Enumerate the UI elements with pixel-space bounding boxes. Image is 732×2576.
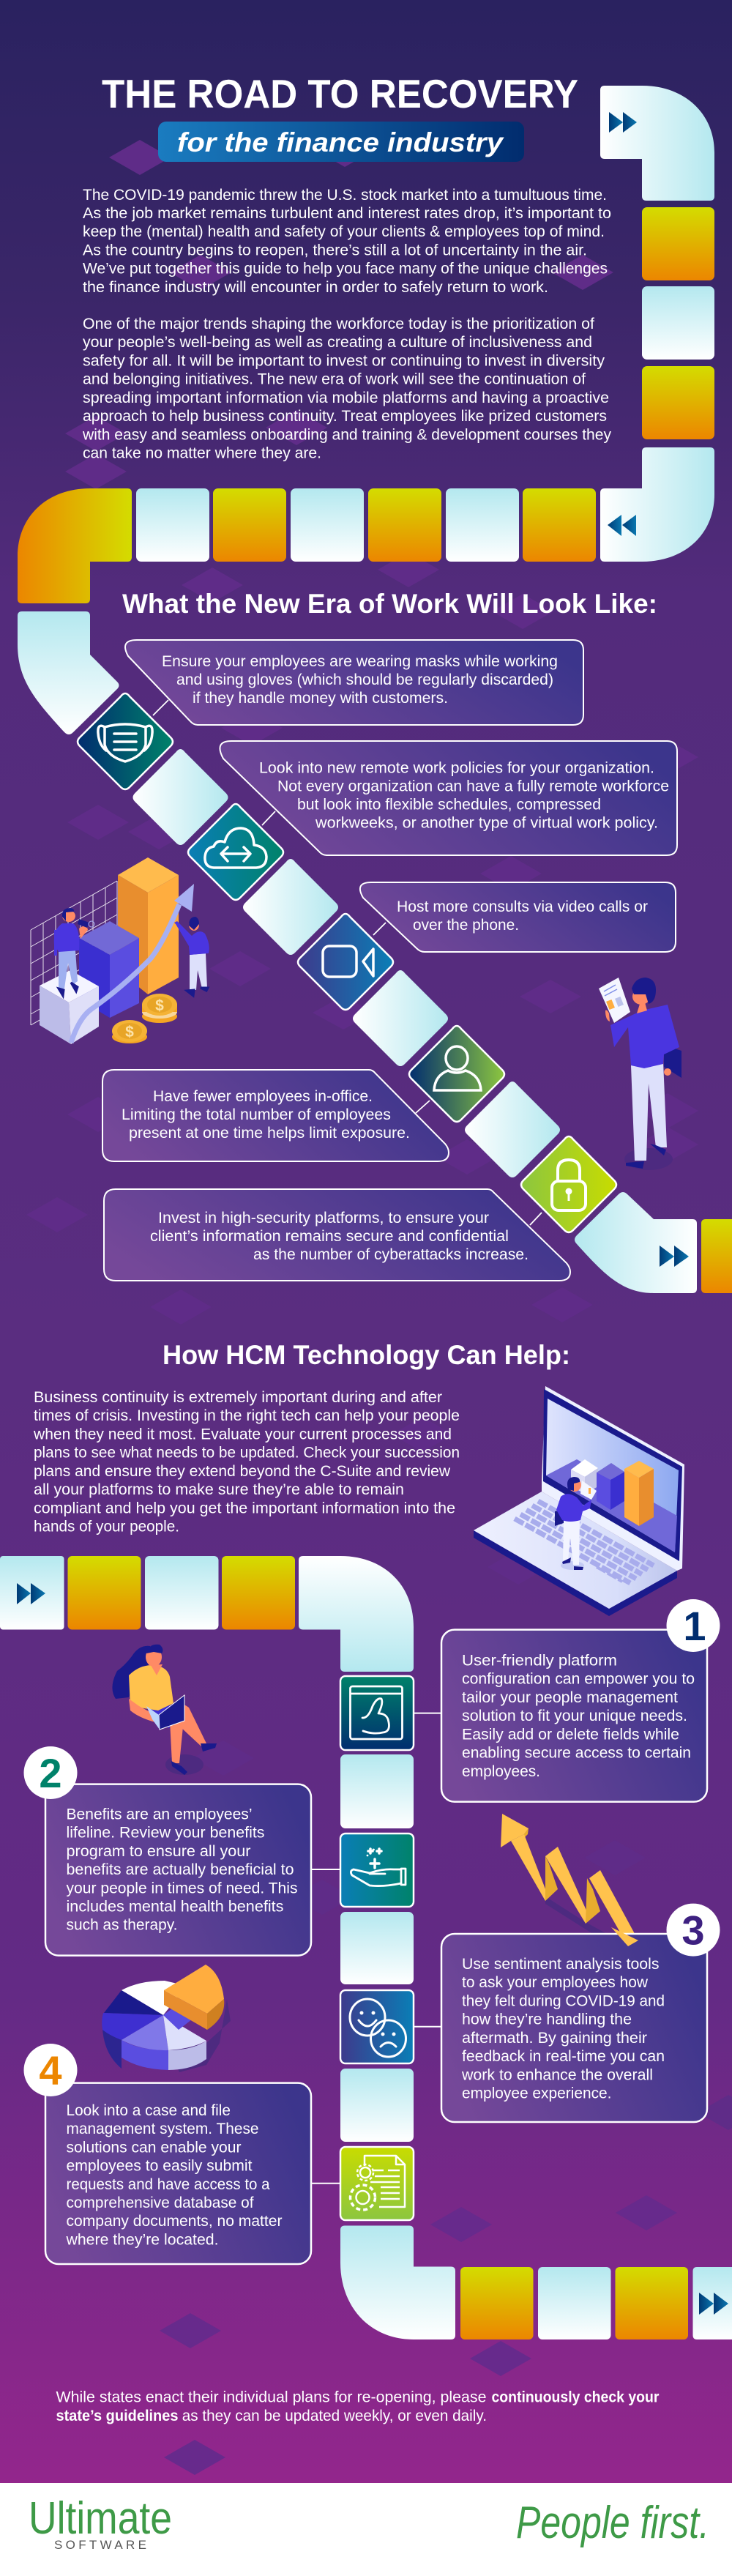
- intro paragraph two: and belonging initiatives. The new era of work will see the continuation of: [83, 371, 586, 388]
- HCM intro paragraph: compliant and help you get the important information into the: [34, 1500, 455, 1516]
- card 4: comprehensive database of: [66, 2195, 254, 2211]
- callout: masks: Ensure your employees are wearing masks while working: [162, 653, 558, 670]
- intro paragraph two: can take no matter where they are.: [83, 445, 321, 461]
- card 4: management system. These: [66, 2121, 259, 2137]
- badge 2: 2: [39, 1750, 62, 1796]
- icon: back arrows: [608, 515, 636, 536]
- keyboard: [515, 1501, 654, 1583]
- callout: security: Invest in high-security platforms, to ensure your: [158, 1210, 489, 1226]
- card 2: [23, 1746, 311, 1956]
- card 3: how they’re handling the: [462, 2011, 632, 2028]
- person left: [54, 908, 94, 996]
- coins: $: [155, 997, 164, 1014]
- callout: remote work: workweeks, or another type of virtual work policy.: [315, 814, 658, 832]
- card 1: User-friendly platform: [462, 1652, 617, 1669]
- title: THE ROAD TO RECOVERY: [102, 71, 578, 116]
- HCM intro paragraph: all your platforms to make sure they’re able to remain: [34, 1481, 404, 1498]
- card 3: they felt during COVID-19 and: [462, 1993, 665, 2009]
- intro paragraph one: The COVID-19 pandemic threw the U.S. stock market into a tumultuous time.: [83, 187, 607, 204]
- closing note: While states enact their individual plans for re-opening, please: [56, 2389, 486, 2406]
- callout: security: as the number of cyberattacks increase.: [253, 1246, 529, 1263]
- badge 3: [666, 1904, 720, 1957]
- coins: [112, 994, 177, 1043]
- card 2: includes mental health benefits: [66, 1898, 284, 1916]
- intro paragraph one: [83, 187, 611, 296]
- HCM intro paragraph: [33, 1389, 460, 1535]
- callout: fewer employees: present at one time helps limit exposure.: [129, 1125, 410, 1142]
- card 1: solution to fit your unique needs.: [462, 1708, 687, 1724]
- card 2: program to ensure all your: [66, 1843, 251, 1860]
- card 4: requests and have access to a: [66, 2176, 270, 2193]
- callout: security: [104, 1189, 570, 1281]
- subtitle banner: [158, 122, 524, 162]
- card 2: such as therapy.: [66, 1917, 177, 1934]
- callout: remote work: [220, 741, 677, 855]
- icon tile: documents and gears: [340, 2147, 414, 2220]
- card 1: tailor your people management: [462, 1689, 678, 1706]
- callout: remote work: Look into new remote work policies for your organization.: [259, 760, 654, 776]
- badge 2: [23, 1746, 78, 1799]
- white cube: [40, 970, 99, 1002]
- closing note: as they can be updated weekly, or even daily.: [182, 2408, 487, 2424]
- heading: new era of work: What the New Era of Work Will Look Like:: [122, 589, 657, 619]
- card 4: where they’re located.: [65, 2231, 218, 2248]
- card 4: employees to easily submit: [66, 2158, 253, 2175]
- illustration: bar chart team: [31, 857, 209, 1044]
- heading: HCM technology: How HCM Technology Can Help:: [163, 1340, 570, 1370]
- connector lines: [311, 1713, 441, 2184]
- intro paragraph one: the finance industry will encounter in order to safely return to work.: [83, 279, 548, 296]
- person right: [174, 917, 209, 996]
- growth arrow: [71, 904, 179, 1043]
- intro paragraph one: keep the (mental) health and safety of your clients & employees top of mind.: [83, 223, 605, 240]
- road: vertical section: [0, 1556, 732, 2339]
- subtitle banner: for the finance industry: [177, 127, 505, 157]
- callout: masks: [125, 640, 583, 725]
- person at laptop: [561, 1561, 584, 1570]
- purple bar: [79, 921, 139, 955]
- intro paragraph two: One of the major trends shaping the workforce today is the prioritization of: [83, 316, 594, 332]
- grid: [31, 881, 117, 1025]
- icon tile: thumbs up: [340, 1676, 414, 1750]
- card 4: company documents, no matter: [66, 2213, 283, 2230]
- card 1: enabling secure access to certain: [462, 1745, 691, 1762]
- card 4: [23, 2044, 311, 2264]
- callout: video consults: [360, 882, 676, 952]
- road: top section: [18, 86, 714, 603]
- card 3: work to enhance the overall: [461, 2066, 653, 2083]
- intro paragraph two: your people’s well-being as well as creating a culture of inclusiveness and: [83, 334, 592, 351]
- card 3: employee experience.: [462, 2085, 612, 2102]
- callout: fewer employees: [102, 1070, 449, 1161]
- icon tile: face mask: [78, 693, 173, 789]
- HCM intro paragraph: plans to see what needs to be updated. Check your succession: [34, 1445, 460, 1462]
- arrow tail over card: [611, 1927, 638, 1946]
- card 1: employees.: [462, 1763, 540, 1780]
- HCM intro paragraph: times of crisis. Investing in the right tech can help your people: [34, 1407, 460, 1424]
- illustration: man with document: [599, 978, 681, 1170]
- card 1: Easily add or delete fields while: [462, 1726, 679, 1743]
- card 2: your people in times of need. This: [66, 1880, 297, 1896]
- icon tile: video camera: [298, 914, 393, 1010]
- badge 1: 1: [683, 1603, 706, 1649]
- intro paragraph two: with easy and seamless onboarding and training & development courses they: [82, 426, 612, 443]
- callout: remote work: Not every organization can have a fully remote workforce: [277, 778, 669, 795]
- closing note: [56, 2389, 659, 2424]
- card 3: [441, 1904, 720, 2122]
- logo: Ultimate Software: SOFTWARE: [54, 2538, 146, 2552]
- callout: video consults: Host more consults via video calls or: [397, 898, 648, 915]
- card 3: aftermath. By gaining their: [462, 2030, 647, 2047]
- card 2: benefits are actually beneficial to: [66, 1861, 294, 1878]
- icon tile: hand with sparkle: [340, 1834, 414, 1907]
- badge 3: 3: [681, 1907, 705, 1954]
- card 1: configuration can empower you to: [462, 1671, 695, 1688]
- icon tile: padlock: [521, 1136, 616, 1232]
- intro paragraph one: We’ve put together this guide to help you face many of the unique challenges: [83, 261, 608, 278]
- road: diagonal section: [18, 611, 732, 1293]
- screen bars: [571, 1459, 598, 1477]
- intro paragraph one: As the country begins to reopen, there’s still a lot of uncertainty in the air.: [83, 242, 587, 259]
- icon tile: person: [409, 1026, 504, 1122]
- intro paragraph two: approach to help business continuity. Treat employees like prized customers: [83, 408, 607, 425]
- callout: video consults: over the phone.: [413, 917, 519, 934]
- closing note: state’s guidelines: [56, 2408, 179, 2424]
- illustration: woman with laptop: [112, 1645, 217, 1775]
- card 3: feedback in real-time you can: [462, 2048, 665, 2065]
- badge 4: [23, 2044, 78, 2096]
- HCM intro paragraph: Business continuity is extremely important during and after: [34, 1389, 442, 1406]
- intro paragraph two: safety for all. It will be important to invest or continuing to invest in diversity: [83, 353, 605, 369]
- coins: $: [125, 1024, 134, 1041]
- card 2: Benefits are an employees’: [66, 1806, 252, 1823]
- card 4: Look into a case and file: [66, 2102, 231, 2119]
- callout: masks: and using gloves (which should be regularly discarded): [176, 671, 553, 688]
- badge 4: 4: [39, 2047, 62, 2093]
- icon tile: happy and sad faces: [340, 1990, 414, 2063]
- icon: forward arrows: [660, 1246, 689, 1267]
- HCM intro paragraph: hands of your people.: [34, 1519, 179, 1535]
- intro paragraph two: spreading important information via mobile platforms and having a proactive: [83, 390, 609, 406]
- callout: remote work: but look into flexible schedules, compressed: [297, 797, 601, 813]
- icon: forward arrows: [609, 112, 637, 133]
- intro paragraph one: As the job market remains turbulent and interest rates drop, it’s important to: [83, 205, 611, 222]
- HCM intro paragraph: plans and ensure they extend beyond the C-Suite and review: [34, 1463, 451, 1480]
- callout: fewer employees: Have fewer employees in-office.: [153, 1088, 373, 1105]
- intro paragraph two: [82, 316, 612, 461]
- badge 1: [666, 1599, 720, 1652]
- icon tile: cloud with arrows: [188, 804, 283, 900]
- illustration: pie chart: [102, 1965, 231, 2072]
- icon: forward arrows: [17, 1583, 45, 1604]
- HCM intro paragraph: when they need it most. Evaluate your current processes and: [33, 1426, 452, 1443]
- callout: fewer employees: Limiting the total number of employees: [122, 1106, 391, 1123]
- icon: forward arrows: [699, 2293, 728, 2315]
- illustration: zigzag arrow: [501, 1814, 638, 1948]
- illustration: laptop: [474, 1386, 684, 1616]
- callout: masks: if they handle money with customers.: [193, 690, 448, 707]
- closing note: continuously check your: [492, 2389, 659, 2406]
- card 1: [441, 1599, 720, 1802]
- card 3: to ask your employees how: [462, 1974, 649, 1991]
- card 3: Use sentiment analysis tools: [462, 1956, 659, 1973]
- logo: Ultimate Software: Ultimate: [29, 2493, 172, 2544]
- card 2: lifeline. Review your benefits: [66, 1825, 265, 1842]
- connector lines: [153, 700, 542, 1225]
- callout: security: client’s information remains secure and confidential: [150, 1228, 509, 1245]
- card 4: solutions can enable your: [66, 2139, 242, 2156]
- orange bar: [118, 857, 179, 893]
